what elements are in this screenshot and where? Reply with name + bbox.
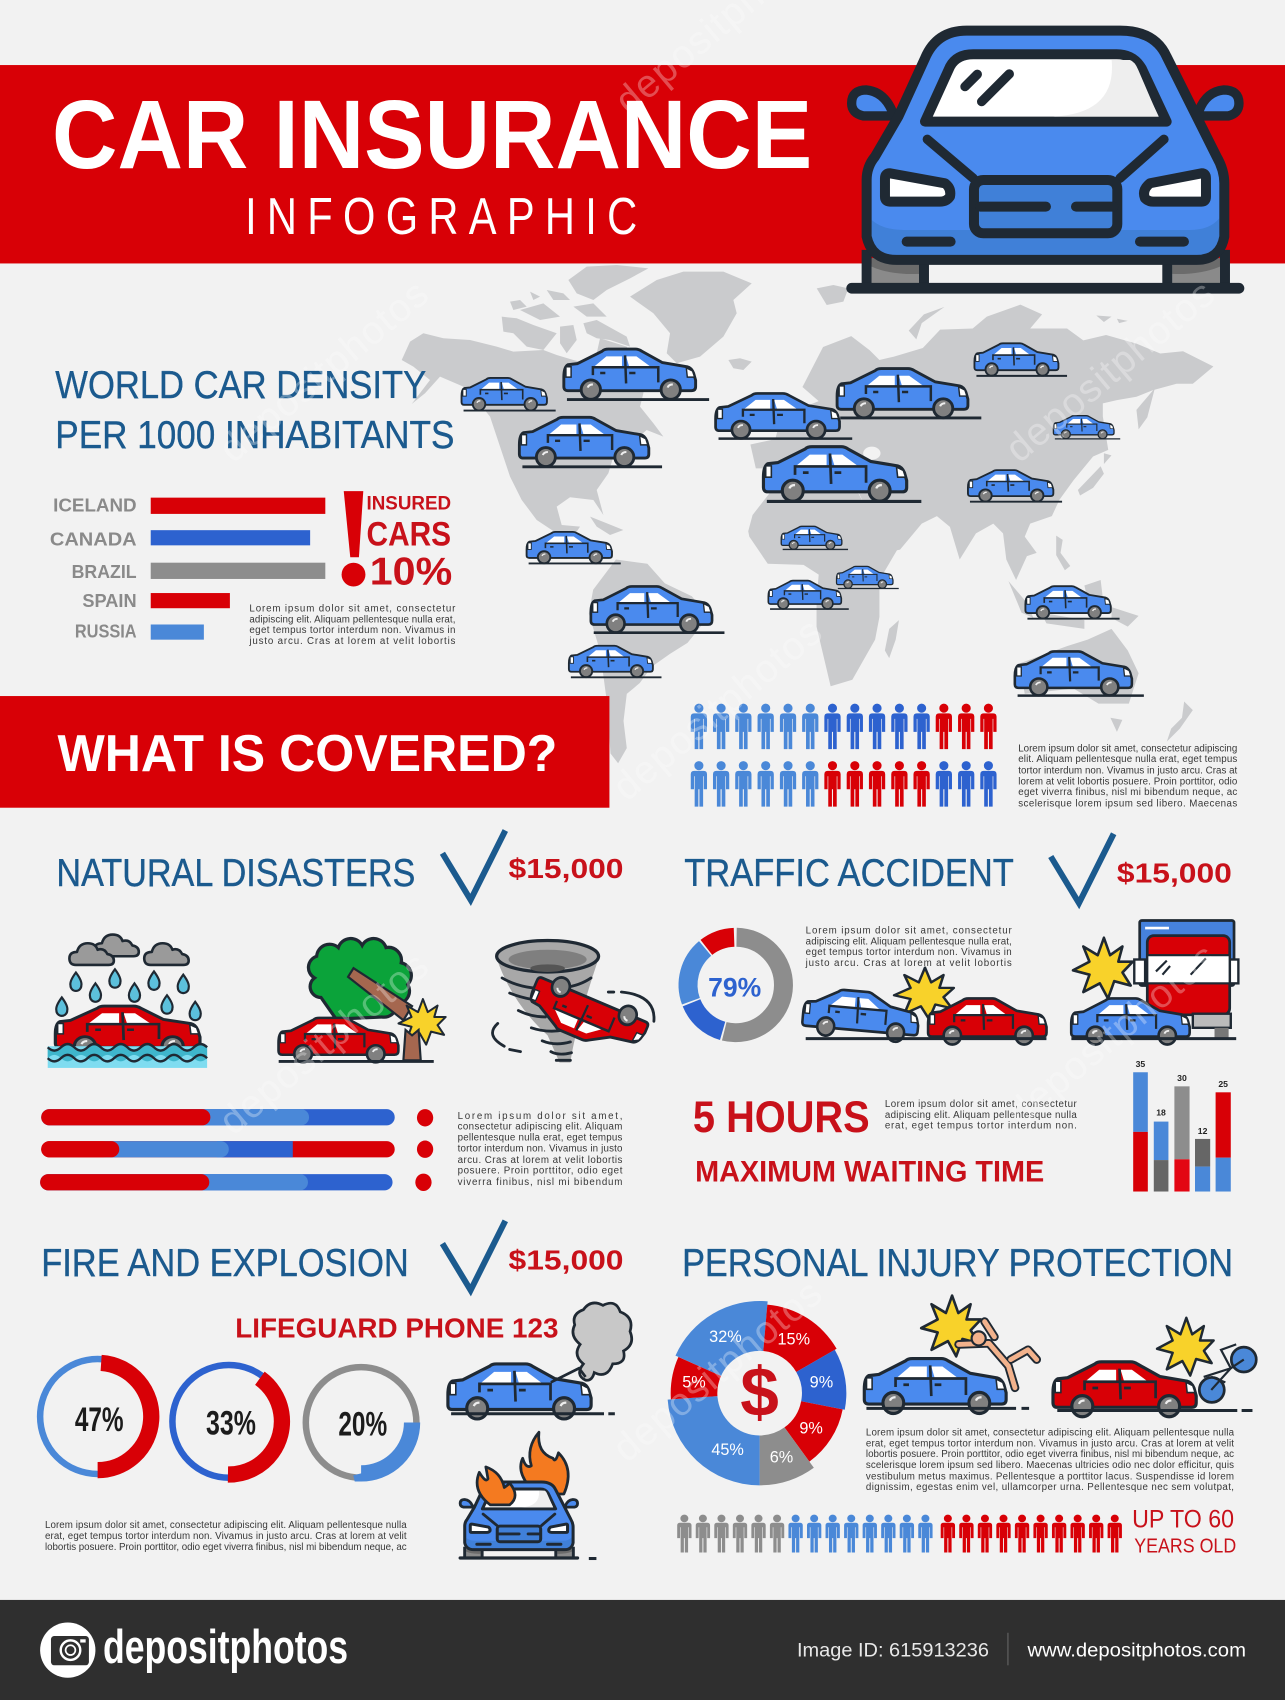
subtitle: INFOGRAPHIC — [245, 187, 637, 245]
text block: density note: justo arcu. Cras at lorem at velit lobortis — [248, 636, 456, 647]
text block: Lorem ipsum dolor sit amet, consectetur — [885, 1099, 1078, 1110]
heading: world car density: PER 1000 INHABITANTS — [55, 414, 454, 457]
age label — [1132, 1506, 1236, 1558]
text block — [805, 925, 1012, 969]
text block: erat, eget tempus tortor interdum non. — [885, 1121, 1077, 1132]
text block: Lorem ipsum dolor sit amet, — [458, 1111, 622, 1122]
text block: pictogram note: tortor interdum non. Vivamus in justo arcu. Cras at — [1018, 766, 1238, 777]
callout: insured cars — [342, 491, 452, 593]
icon: tree on car — [279, 939, 446, 1062]
icon: two cars collision — [801, 968, 1047, 1044]
text block: pictogram note: scelerisque lorem ipsum sed libero. Maecenas — [1018, 799, 1237, 810]
stacked bars — [40, 1109, 433, 1191]
pie chart — [668, 1301, 846, 1485]
world map — [402, 265, 1213, 763]
text block: eget tempus tortor interdum non. Vivamus in — [806, 947, 1012, 958]
section banner: what is covered — [0, 696, 609, 808]
heading: world car density — [55, 364, 454, 457]
bar chart: countries: ICELAND — [53, 495, 137, 516]
watermarks: depositphotos — [1000, 936, 1225, 1134]
text block: pictogram note: lorem at velit lobortis posuere. Proin porttitor, odio — [1018, 776, 1238, 787]
text block: density note: adipiscing elit. Aliquam pellentesque nulla erat, — [249, 614, 455, 625]
logo text: depositphotos — [103, 1621, 348, 1674]
text block: arcu. Cras at lorem at velit lobortis — [458, 1155, 623, 1166]
text block: pellentesque nulla erat, eget tempus — [458, 1133, 623, 1144]
watermarks: depositphotos — [211, 944, 437, 1143]
text block: consectetur adipiscing elit. Aliquam — [458, 1122, 622, 1133]
icon: check mark — [442, 830, 505, 900]
icon: flooded car — [48, 935, 207, 1068]
text block: scelerisque lorem ipsum sed libero. Maecenas ultricies odio nec dolor efficitur, quis — [866, 1460, 1234, 1471]
text block: pictogram note: elit. Aliquam pellentesque nulla erat, eget tempus — [1018, 754, 1237, 765]
ring chart: 47 percent — [40, 1359, 155, 1474]
text block: adipiscing elit. Aliquam pellentesque nulla erat, — [806, 936, 1012, 947]
pie chart: 45% — [711, 1441, 744, 1459]
text block: density note: eget tempus tortor interdum non. Vivamus in — [249, 625, 455, 636]
text block: posuere. Proin porttitor, odio eget — [458, 1166, 623, 1177]
heading: world car density: WORLD CAR DENSITY — [55, 364, 426, 407]
text block: pictogram note: eget viverra finibus, nisl mi bibendum neque, ac — [1018, 787, 1237, 798]
panel: fire and explosion — [40, 1221, 632, 1559]
heading: TRAFFIC ACCIDENT — [684, 852, 1014, 895]
donut chart: 79% — [708, 971, 761, 1002]
amount: $15,000 — [509, 1244, 624, 1276]
heading: NATURAL DISASTERS — [56, 852, 415, 895]
icon: car hits cyclist — [1053, 1318, 1256, 1417]
website: www.depositphotos.com — [1026, 1640, 1246, 1662]
section banner: what is covered: WHAT IS COVERED? — [57, 725, 557, 783]
header banner — [0, 65, 1285, 263]
text block: adipiscing elit. Aliquam pellentesque nulla — [885, 1110, 1077, 1121]
bar chart: countries: BRAZIL — [72, 561, 137, 582]
title: CAR INSURANCE — [52, 80, 812, 189]
callout: insured cars: CARS — [367, 515, 451, 553]
pie chart: 32% — [709, 1328, 742, 1346]
icon: check mark — [1051, 834, 1114, 903]
amount: $15,000 — [1117, 857, 1232, 889]
pictogram rows — [691, 704, 997, 807]
icon: smoking car — [448, 1303, 632, 1419]
text block — [885, 1099, 1078, 1132]
icon: burning car — [460, 1432, 596, 1559]
callout: insured cars: 10% — [370, 550, 452, 593]
text block: justo arcu. Cras at lorem at velit lobortis — [805, 958, 1012, 969]
pie chart: 15% — [778, 1330, 810, 1348]
map cars — [462, 343, 1144, 696]
panel: natural disasters — [40, 830, 654, 1191]
text block: erat, eget tempus tortor interdum non. Vivamus in justo arcu. Cras at lorem at velit — [45, 1531, 407, 1542]
bar chart: 18 — [1156, 1108, 1166, 1118]
bar chart: 35 — [1136, 1059, 1145, 1069]
pictogram row — [677, 1515, 1122, 1553]
text block: density note: Lorem ipsum dolor sit amet, consectetur — [249, 603, 456, 614]
text block: pictogram note — [1018, 743, 1238, 810]
callout: 5 hours: 5 HOURS — [693, 1093, 870, 1142]
bar chart: countries: SPAIN — [82, 590, 137, 611]
icon: large blue car front — [852, 31, 1239, 288]
text block: Lorem ipsum dolor sit amet, consectetur — [806, 925, 1012, 936]
footer bar — [0, 1600, 1285, 1700]
callout: insured cars: INSURED — [367, 493, 451, 515]
ring chart: 20 percent: 20% — [338, 1405, 387, 1443]
donut chart — [669, 918, 803, 1052]
text block — [866, 1427, 1235, 1493]
watermarks: depositphotos — [605, 1272, 830, 1471]
bar chart: 12 — [1198, 1126, 1208, 1136]
text block — [45, 1520, 407, 1553]
text block: dignissim, egestas enim vel, ullamcorper urna. Pellentesque nec sem volutpat, — [866, 1482, 1234, 1493]
panel: traffic accident — [669, 834, 1238, 1192]
bar chart — [1133, 1059, 1231, 1192]
pie chart: 9% — [799, 1419, 823, 1437]
pie chart: $ — [740, 1353, 779, 1431]
text block: pictogram note: Lorem ipsum dolor sit amet, consectetur adipiscing — [1018, 743, 1237, 754]
bar chart: countries: CANADA — [50, 528, 137, 549]
age label: UP TO 60 — [1132, 1506, 1234, 1534]
text block: viverra finibus, nisl mi bibendum — [458, 1177, 622, 1188]
bar chart: 25 — [1218, 1079, 1228, 1089]
pie chart: 9% — [810, 1374, 833, 1392]
phone line: LIFEGUARD PHONE 123 — [235, 1311, 558, 1343]
ring chart: 20 percent — [306, 1367, 416, 1478]
text block: density note — [248, 603, 456, 647]
text block: lobortis posuere. Proin porttitor, odio eget viverra finibus, nisl mi bibendum neque, ac — [45, 1542, 407, 1553]
icon: camera logo — [40, 1622, 95, 1678]
pie chart: 6% — [770, 1449, 793, 1467]
image id: Image ID: 615913236 — [797, 1640, 989, 1662]
text block: tortor interdum non. Vivamus in justo — [458, 1144, 623, 1155]
text block: Lorem ipsum dolor sit amet, consectetur adipiscing elit. Aliquam pellentesque nulla — [866, 1427, 1235, 1438]
watermarks: depositphotos — [605, 610, 830, 809]
watermarks: depositphotos — [997, 272, 1223, 471]
icon: tornado with car — [493, 941, 654, 1062]
icon: truck collision — [1071, 920, 1238, 1044]
icon: car hits pedestrian — [864, 1296, 1037, 1414]
amount: $15,000 — [509, 852, 624, 884]
icon: check mark — [442, 1221, 505, 1290]
age label: YEARS OLD — [1134, 1535, 1236, 1558]
watermarks — [211, 0, 1225, 1471]
pie chart: 5% — [682, 1374, 706, 1392]
watermarks: depositphotos — [211, 272, 437, 471]
bar chart: countries — [50, 495, 325, 641]
text block: vestibulum metus maximus. Pellentesque a porttitor lacus. Suspendisse id lorem — [866, 1471, 1234, 1482]
text block — [458, 1111, 623, 1188]
heading: FIRE AND EXPLOSION — [41, 1242, 409, 1285]
callout: 5 hours: MAXIMUM WAITING TIME — [695, 1157, 1044, 1189]
bar chart: 30 — [1177, 1073, 1187, 1083]
text block: Lorem ipsum dolor sit amet, consectetur adipiscing elit. Aliquam pellentesque nulla — [45, 1520, 407, 1531]
callout: 5 hours — [693, 1093, 1044, 1189]
ring chart: 47 percent: 47% — [75, 1401, 124, 1439]
text block: lobortis posuere. Proin porttitor, odio eget viverra finibus, nisl mi bibendum neque, ac — [866, 1449, 1234, 1460]
text block: erat, eget tempus tortor interdum non. Vivamus in justo arcu. Cras at lorem at velit — [866, 1438, 1234, 1449]
bar chart: countries: RUSSIA — [75, 621, 137, 641]
ring chart: 33 percent: 33% — [206, 1404, 256, 1442]
panel: personal injury protection — [668, 1242, 1256, 1558]
ring chart: 33 percent — [155, 1347, 303, 1496]
